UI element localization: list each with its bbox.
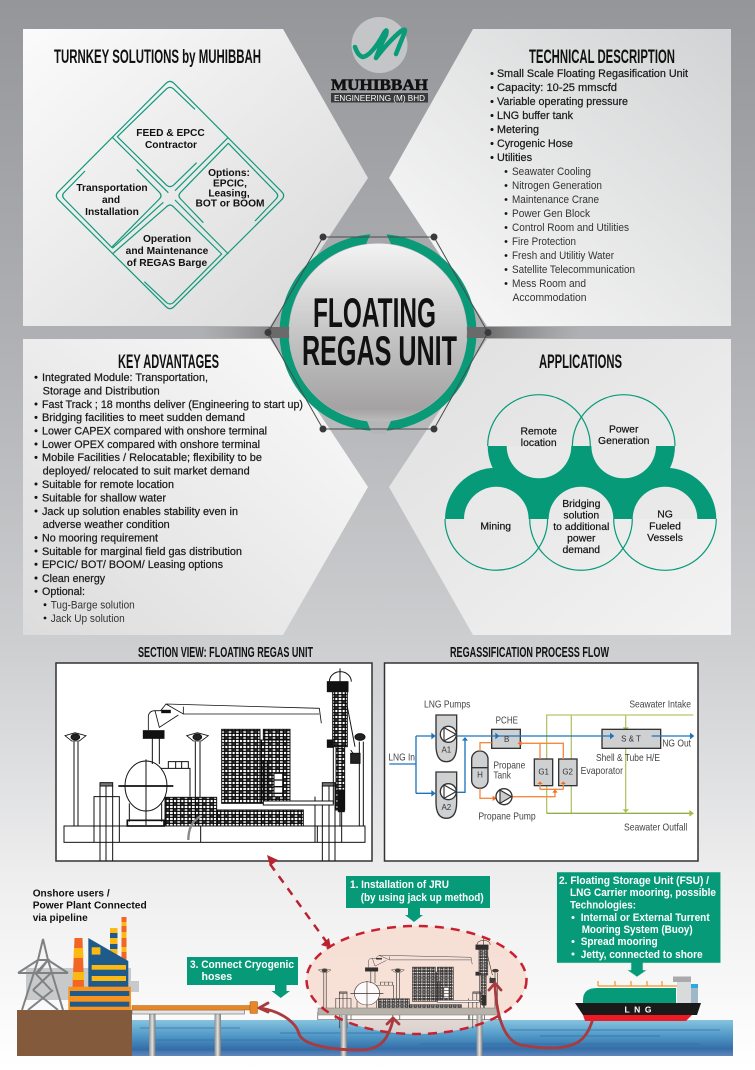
circle label: ng fueled vessels: Fueled [649,522,681,532]
bullet list: main items: Metering [497,124,539,136]
logo: muhibbah: MUHIBBAH [331,77,429,94]
callout 2: floating storage unit: Spread mooring [581,936,658,948]
callout 3: connect hoses: hoses [202,971,232,983]
circle label: bridging solution: power [567,534,596,544]
bullet list: main items: Small Scale Floating Regasification Unit [497,68,688,80]
bullet list: advantages: Lower OPEX compared with onshore terminal [42,439,260,451]
bullet list: utilities: Mess Room and [512,278,586,290]
process labels: B [504,735,509,744]
section drawing [64,668,365,861]
bullet list: advantages: Lower CAPEX compared with onshore terminal [42,426,267,438]
circle label: mining: Mining [480,522,511,532]
arrow: hose from ship to platform [489,983,601,1048]
bullet list: advantages: Suitable for marginal field gas distribution [42,546,242,558]
callout 2: floating storage unit: 2. Floating Storage Unit (FSU) / [559,875,709,887]
quadrant: operation and maintenance: of REGAS Barge [127,258,208,269]
bullet list: advantages: EPCIC/ BOT/ BOOM/ Leasing options [42,559,223,571]
quadrant: transportation: and [102,195,120,206]
bullet list: utilities: Fresh and Utilitiy Water [512,250,614,262]
circle label: bridging solution: demand [563,545,600,556]
process labels: LNG In [388,753,415,764]
dark connector bar [200,327,580,338]
process labels: S & T [621,735,641,744]
jetty and pipeline [132,1002,258,1056]
panel: technical description [389,29,731,326]
circle label: bridging solution: to additional [553,522,609,533]
bullet list: advantages: Suitable for remote location [42,479,174,491]
dashed ellipse: jack up unit [306,926,526,1056]
heading: key advantages: KEY ADVANTAGES [118,352,219,373]
circle label: ng fueled vessels: Vessels [647,533,683,544]
bullet list: utilities: Fire Protection [512,236,576,248]
circle label: power generation: Power [609,424,639,436]
land [17,1010,132,1056]
quadrant: transportation: Transportation [76,183,148,194]
process labels [388,699,691,834]
callout 2: floating storage unit: Jetty, connected to shore [581,949,703,961]
bullet list: advantages: Suitable for shallow water [42,492,166,504]
bullet list: utilities [506,166,635,304]
process labels: A1 [441,746,452,755]
bullet list: utilities: Accommodation [512,292,587,304]
ship label: L N G [624,1005,652,1015]
bullet list: utilities: Nitrogen Generation [512,180,602,192]
process labels: NG Out [662,738,691,749]
callout 2: floating storage unit: LNG Carrier mooring, possible [570,887,716,899]
bullet list: main items [492,68,688,164]
icon: chimneys [72,917,126,987]
central badge: floating regas unit [264,231,492,434]
bullet list: advantages [36,372,303,598]
onshore caption: Onshore users / [33,888,110,900]
circle label: ng fueled vessels: NG [657,510,673,520]
bullet list: main items: Capacity: 10-25 mmscfd [497,82,617,94]
bullet list: advantages: Optional: [42,586,85,598]
callout 2: floating storage unit: Internal or External Turrent [581,912,710,924]
icon: transmission tower [18,939,68,1010]
bullet list: advantages: No mooring requirement [42,532,158,544]
circle label: remote location: location [521,438,557,449]
bullet list: utilities: Control Room and Utilities [512,222,629,234]
callout 1: installation [346,876,490,922]
callout 3: connect hoses: 3. Connect Cryogenic [190,959,294,971]
title: REGAS UNIT [302,327,457,374]
section drawing, small [318,939,498,1028]
quadrant: options: Leasing, [208,188,250,200]
onshore caption: via pipeline [33,912,88,924]
bullet list: advantages: Clean energy [42,573,106,585]
onshore caption [33,888,147,924]
bullet list: advantages: Jack up solution enables stability even in [42,506,238,518]
process labels: H [477,770,483,779]
callout 1: installation: (by using jack up method) [361,892,484,904]
bullet list: main items: Variable operating pressure [497,96,628,108]
quadrant: feed and epcc: FEED & EPCC [136,128,205,139]
logo: muhibbah: ENGINEERING (M) BHD [334,93,425,103]
quadrant: operation and maintenance: Operation [143,234,191,245]
callout 3: connect hoses [187,957,298,998]
quadrant: options: BOT or BOOM [195,198,265,210]
bullet list: optional [45,600,135,625]
process labels: Shell & Tube H/E [596,753,660,764]
bullet list: optional: Tug-Barge solution [51,600,135,612]
onshore power plant [17,888,147,1056]
sea [132,1020,733,1056]
process labels: Seawater Outfall [624,823,687,834]
bullet list: main items: Cyrogenic Hose [497,138,573,150]
arrow: dashed link to section view [267,855,331,948]
overlapping circles diagram [445,395,716,570]
diamond diagram [56,81,284,309]
circle label: remote location: Remote [521,426,557,438]
bullet list: optional: Jack Up solution [51,613,125,625]
bullet list: advantages: Integrated Module: Transportation, [42,372,208,384]
process labels: Propane [493,760,526,771]
process labels: A2 [441,803,452,812]
process labels: Tank [493,770,512,781]
bullet list: advantages: deployed/ relocated to suit market demand [43,466,250,478]
quadrant: transportation: Installation [85,207,139,218]
process labels: LNG Pumps [424,699,470,710]
quadrant: options: EPCIC, [213,178,247,190]
heading: section view: SECTION VIEW: FLOATING REGAS UNIT [138,645,313,661]
callout 1: installation: 1. Installation of JRU [350,879,449,891]
quadrant: options: Options: [208,168,250,179]
bullet list: utilities: Satellite Telecommunication [512,264,635,276]
panel: regassification process flow [384,645,698,861]
callout 2: floating storage unit [557,872,721,977]
process labels: G2 [562,767,574,776]
logo: muhibbah [331,17,429,103]
process flow diagram [388,699,694,834]
panel: applications [389,339,731,635]
bullet list: utilities: Maintenance Crane [512,194,599,206]
bullet list: advantages: Bridging facilities to meet sudden demand [42,412,245,424]
icon: factory building [68,938,131,1010]
bullet list: advantages: Mobile Facilities / Relocatable; flexibility to be [42,452,262,464]
heading: process flow: REGASSIFICATION PROCESS FLOW [450,645,609,661]
callout 2: floating storage unit: Technologies: [570,900,636,912]
panel: section view [56,645,372,861]
bullet list: main items: LNG buffer tank [497,110,574,122]
panel: turnkey solutions [23,29,368,326]
process labels: Propane Pump [478,811,536,822]
circle label: bridging solution: Bridging [562,499,601,510]
process labels: PCHE [496,715,518,726]
bullet list: advantages: adverse weather condition [43,519,170,531]
quadrant: feed and epcc: Contractor [145,140,197,151]
circle label: bridging solution: solution [563,510,599,522]
process labels: Evaporator [581,766,623,777]
heading: turnkey solutions: TURNKEY SOLUTIONS by MUHIBBAH [54,46,261,68]
bullet list: utilities: Seawater Cooling [512,166,591,178]
callout 2: floating storage unit: Mooring System (Buoy) [582,924,693,936]
quadrant: operation and maintenance: and Maintenance [126,246,209,257]
panel: key advantages [23,339,368,635]
process labels: Seawater Intake [629,700,691,711]
bullet list: utilities: Power Gen Block [512,208,591,220]
title: FLOATING [313,289,436,336]
bullet list: advantages: Storage and Distribution [43,386,160,398]
circle label: power generation: Generation [598,436,650,447]
ship: lng carrier [575,976,701,1021]
onshore caption: Power Plant Connected [33,900,147,912]
heading: applications: APPLICATIONS [539,352,622,373]
process labels: G1 [538,767,550,776]
bullet list: main items: Utilities [497,152,532,164]
bullet list: advantages: Fast Track ; 18 months deliver (Engineering to start up) [42,399,303,411]
arrow: hose from platform to shore [259,1003,399,1050]
